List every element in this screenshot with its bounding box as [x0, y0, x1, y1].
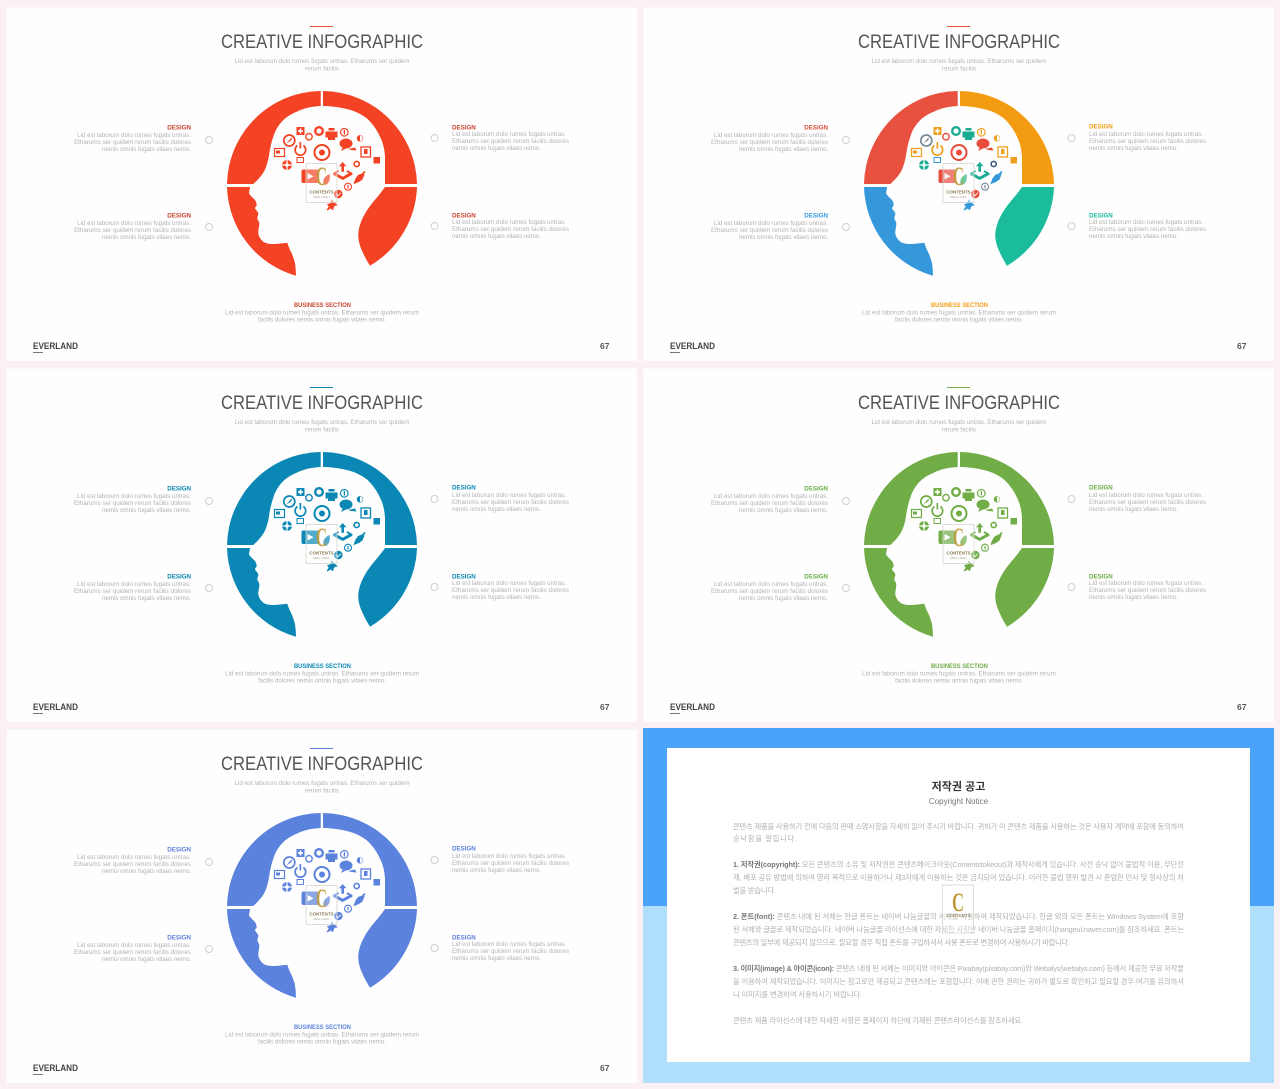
panel: red infographic: DESIGN: [167, 212, 192, 220]
panel: green infographic: CONTENTS: [946, 550, 971, 556]
panel: teal infographic: DESIGN: [452, 574, 476, 580]
panel: multicolor infographic: nemis omnis fugats vitaes nemo.: [739, 234, 828, 241]
panel: teal infographic: Lid est laborum dolo rumes fugats untras. Etharums ser quidem: [234, 419, 410, 426]
panel: multicolor infographic: 67: [1237, 341, 1247, 351]
panel: teal infographic: rerum facilis: [305, 426, 339, 434]
panel: teal infographic: DESIGN: [167, 486, 192, 492]
panel: multicolor infographic: [644, 8, 1274, 361]
panel: multicolor infographic: Etharums ser quidem rerum facilis dolores: [711, 139, 828, 146]
panel: blue infographic: nemis omnis fugats vitaes nemo.: [102, 956, 191, 963]
panel: green infographic: DESIGN: [1089, 484, 1113, 492]
panel: teal infographic: BUSINESS SECTION: [294, 663, 351, 670]
panel: blue infographic: DESIGN: [167, 934, 192, 942]
panel: green infographic: EVERLAND: [670, 702, 715, 712]
notice body text: 3. 이미지(image) & 아이콘(icon): 콘텐츠 내에 된 서체는 이미지와 아이콘은 Pixabay(pixabay.com)와 Webalys(webalys.com) 등에서 제공한 무료 저작물: [733, 964, 1184, 973]
panel: red infographic: Lid est laborum dolo rumes fugats untras.: [77, 132, 191, 139]
panel: red infographic: nemis omnis fugats vitaes nemo.: [102, 146, 191, 153]
panel: multicolor infographic: Lid est laborum dolo rumes fugats untras. Etharums ser quidem: [872, 58, 1046, 65]
panel: teal infographic: nemis omnis fugats vitaes nemo.: [102, 507, 191, 514]
notice body text: 을 이용하여 제작되었습니다. 이미지는 참고로만 제공되고 콘텐츠에는 포함합니다. 이에 관한 권리는 귀하가 별도로 확인하고 필요할 경우 여기를 유의하셔: [733, 977, 1184, 986]
panel: green infographic: nemis omnis fugats vitaes nemo.: [1089, 506, 1178, 513]
panel: multicolor infographic: Lid est laborum dolo rumes fugats untras. Etharums ser quidem rerum: [862, 310, 1056, 316]
panel: teal infographic: CONTENTS: [309, 550, 334, 556]
panel: blue infographic: DESIGN: [452, 934, 476, 942]
panel: red infographic: 67: [600, 341, 610, 351]
panel: multicolor infographic: nemis omnis fugats vitaes nemo.: [1089, 233, 1178, 240]
panel: red infographic: EVERLAND: [33, 341, 78, 351]
panel: teal infographic: DESIGN: [452, 484, 476, 492]
panel: red infographic: CONTENTS: [309, 190, 334, 194]
panel: green infographic: Etharums ser quidem rerum facilis dolores: [711, 500, 828, 507]
panel: blue infographic: C: [316, 884, 327, 913]
panel: teal infographic: Etharums ser quidem rerum facilis dolores: [452, 587, 569, 594]
panel: red infographic: Lid est laborum dolo rumes fugats untras. Etharums ser quidem: [234, 58, 410, 65]
panel: red infographic: DESIGN: [452, 124, 476, 132]
panel: red infographic: CREATIVE INFOGRAPHIC: [221, 31, 423, 53]
panel: blue infographic: MALL LOGO: [313, 917, 330, 921]
panel: green infographic: MALL LOGO: [950, 556, 967, 560]
panel: blue infographic: nemis omnis fugats vitaes nemo.: [102, 868, 191, 875]
panel: green infographic: Lid est laborum dolo rumes fugats untras. Etharums ser quidem rerum: [862, 670, 1056, 678]
panel: red infographic: Lid est laborum dolo rumes fugats untras.: [452, 219, 566, 226]
panel: multicolor infographic: EVERLAND: [670, 341, 715, 351]
panel: green infographic: DESIGN: [1089, 574, 1113, 580]
panel: blue infographic: CONTENTS: [309, 912, 334, 916]
panel: red infographic: Etharums ser quidem rerum facilis dolores: [74, 227, 191, 234]
panel: multicolor infographic: BUSINESS SECTION: [931, 302, 988, 309]
panel: blue infographic: Etharums ser quidem rerum facilis dolores: [452, 948, 569, 955]
panel: red infographic: rerum facilis: [305, 66, 339, 72]
panel: multicolor infographic: DESIGN: [804, 124, 829, 132]
notice body text: [733, 822, 1184, 1025]
panel: green infographic: DESIGN: [804, 574, 829, 580]
panel: teal infographic: Etharums ser quidem rerum facilis dolores: [74, 588, 191, 595]
heading: copyright notice: 저작권 공고: [932, 779, 985, 793]
panel: multicolor infographic: Etharums ser quidem rerum facilis dolores: [711, 227, 828, 234]
notice body text: 승낙함을 알립니다.: [733, 834, 797, 843]
subheading: Copyright Notice: [929, 797, 989, 806]
panel: blue infographic: Etharums ser quidem rerum facilis dolores: [452, 860, 569, 867]
panel: red infographic: Lid est laborum dolo rumes fugats untras. Etharums ser quidem rerum: [225, 310, 419, 316]
panel: teal infographic: Lid est laborum dolo rumes fugats untras.: [77, 493, 191, 500]
panel: green infographic: facilis dolores nemis omnis fugats vitaes nemo.: [895, 678, 1023, 684]
panel: green infographic: nemis omnis fugats vitaes nemo.: [739, 595, 828, 602]
panel: multicolor infographic: DESIGN: [804, 212, 829, 220]
panel: green infographic: rerum facilis: [942, 426, 976, 434]
panel: red infographic: nemis omnis fugats vitaes nemo.: [102, 234, 191, 241]
panel: teal infographic: DESIGN: [167, 574, 192, 580]
panel: teal infographic: Lid est laborum dolo rumes fugats untras.: [452, 492, 566, 499]
panel: blue infographic: Etharums ser quidem rerum facilis dolores: [74, 861, 191, 868]
panel: blue infographic: Etharums ser quidem rerum facilis dolores: [74, 949, 191, 956]
panel: red infographic: Etharums ser quidem rerum facilis dolores: [74, 139, 191, 146]
panel: multicolor infographic: C: [953, 162, 964, 191]
panel: green infographic: Etharums ser quidem rerum facilis dolores: [1089, 587, 1206, 594]
panel: green infographic: [644, 368, 1274, 722]
panel: multicolor infographic: DESIGN: [1089, 124, 1113, 130]
panel: green infographic: Lid est laborum dolo rumes fugats untras.: [1089, 492, 1203, 499]
panel: multicolor infographic: Etharums ser quidem rerum facilis dolores: [1089, 138, 1206, 145]
panel: teal infographic: Lid est laborum dolo rumes fugats untras.: [77, 581, 191, 588]
panel: green infographic: Lid est laborum dolo rumes fugats untras.: [714, 581, 828, 588]
panel: multicolor infographic: nemis omnis fugats vitaes nemo.: [1089, 145, 1178, 152]
panel: red infographic: Lid est laborum dolo rumes fugats untras.: [77, 220, 191, 227]
panel: multicolor infographic: Lid est laborum dolo rumes fugats untras.: [714, 220, 828, 227]
panel: green infographic: CREATIVE INFOGRAPHIC: [858, 392, 1060, 414]
panel: blue infographic: DESIGN: [167, 846, 192, 854]
panel: red infographic: DESIGN: [452, 212, 476, 220]
notice body text: 벌을 받습니다.: [733, 886, 776, 895]
panel: multicolor infographic: Lid est laborum dolo rumes fugats untras.: [1089, 219, 1203, 226]
panel: multicolor infographic: Lid est laborum dolo rumes fugats untras.: [714, 132, 828, 139]
panel: copyright notice: [643, 728, 1274, 1083]
panel: blue infographic: rerum facilis: [305, 788, 339, 794]
panel: multicolor infographic: DESIGN: [1089, 212, 1113, 220]
panel: teal infographic: Lid est laborum dolo rumes fugats untras. Etharums ser quidem rerum: [225, 670, 419, 678]
panel: green infographic: Etharums ser quidem rerum facilis dolores: [1089, 499, 1206, 506]
panel: blue infographic: Lid est laborum dolo rumes fugats untras.: [452, 853, 566, 860]
panel: red infographic: Etharums ser quidem rerum facilis dolores: [452, 138, 569, 145]
panel: teal infographic: nemis omnis fugats vitaes nemo.: [452, 506, 541, 513]
logo watermark: C: [952, 888, 964, 917]
panel: blue infographic: DESIGN: [452, 846, 476, 852]
panel: red infographic: Etharums ser quidem rerum facilis dolores: [452, 226, 569, 233]
notice body text: 2. 폰트(font): 콘텐츠 내에 된 서체는 한글 폰트는 네이버 나눔글꼴의 서체를 사용하여 제작되었습니다. 한글 외의 모든 폰트는 Windows System에 포함: [733, 912, 1184, 921]
logo watermark: CONTENTS: [946, 913, 971, 918]
panel: teal infographic: [6, 368, 637, 722]
panel: green infographic: DESIGN: [804, 486, 829, 492]
panel: teal infographic: nemis omnis fugats vitaes nemo.: [102, 595, 191, 602]
panel: red infographic: facilis dolores nemis omnis fugats vitaes nemo.: [258, 316, 386, 324]
panel: green infographic: Lid est laborum dolo rumes fugats untras. Etharums ser quidem: [872, 419, 1046, 426]
notice body text: 재, 배포 공유 방법에 의하여 영리 목적으로 이용하거나 제3자에게 이용하는 것은 금지되어 있습니다. 이러한 불법 행위 발견 시 준엄한 민사 및 형사상의 처: [733, 873, 1184, 882]
panel: green infographic: nemis omnis fugats vitaes nemo.: [739, 507, 828, 514]
panel: teal infographic: CREATIVE INFOGRAPHIC: [221, 392, 423, 414]
notice body text: 콘텐츠 제품을 사용하기 전에 다음의 판매 소명사항을 자세히 읽어 주시기 바랍니다. 귀하가 이 콘텐츠 제품을 사용하는 것은 사용자 계약에 포함에 동의하여: [733, 822, 1184, 831]
panel: blue infographic: Lid est laborum dolo rumes fugats untras.: [77, 854, 191, 861]
panel: red infographic: DESIGN: [167, 124, 192, 132]
panel: red infographic: C: [316, 162, 327, 191]
notice body text: 콘텐츠 제품 라이선스에 대한 자세한 사항은 홈페이지 하단에 기재된 콘텐츠라이선스를 참조하세요.: [733, 1016, 1023, 1025]
panel: blue infographic: EVERLAND: [33, 1063, 78, 1073]
logo watermark: [942, 885, 974, 933]
panel: teal infographic: Lid est laborum dolo rumes fugats untras.: [452, 580, 566, 587]
panel: green infographic: C: [953, 523, 964, 552]
panel: blue infographic: Lid est laborum dolo rumes fugats untras. Etharums ser quidem: [234, 780, 410, 787]
panel: green infographic: 67: [1237, 702, 1247, 712]
panel: green infographic: Lid est laborum dolo rumes fugats untras.: [714, 493, 828, 500]
panel: blue infographic: Lid est laborum dolo rumes fugats untras.: [452, 941, 566, 948]
panel: red infographic: nemis omnis fugats vitaes nemo.: [452, 145, 541, 152]
panel: teal infographic: C: [316, 523, 327, 552]
panel: teal infographic: nemis omnis fugats vitaes nemo.: [452, 594, 541, 601]
panel: teal infographic: facilis dolores nemis omnis fugats vitaes nemo.: [258, 678, 386, 684]
panel: blue infographic: Lid est laborum dolo rumes fugats untras. Etharums ser quidem rerum: [225, 1032, 419, 1038]
panel: blue infographic: 67: [600, 1063, 610, 1073]
panel: multicolor infographic: CREATIVE INFOGRAPHIC: [858, 31, 1060, 53]
panel: blue infographic: BUSINESS SECTION: [294, 1024, 351, 1031]
panel: blue infographic: nemis omnis fugats vitaes nemo.: [452, 867, 541, 874]
panel: multicolor infographic: MALL LOGO: [950, 195, 967, 199]
panel: green infographic: Etharums ser quidem rerum facilis dolores: [711, 588, 828, 595]
panel: blue infographic: Lid est laborum dolo rumes fugats untras.: [77, 942, 191, 949]
panel: green infographic: nemis omnis fugats vitaes nemo.: [1089, 594, 1178, 601]
panel: blue infographic: CREATIVE INFOGRAPHIC: [221, 753, 423, 775]
panel: multicolor infographic: CONTENTS: [946, 190, 971, 194]
notice body text: 된 서체와 글꼴로 제작되었습니다. 네이버 나눔글꼴 라이선스에 대한 자세한 사항은 네이버 나눔글꼴 홈페이지(hangeul.naver.com)를 참조하세요. 폰트는: [733, 925, 1184, 934]
notice body text: 니 이미지를 변경하여 사용하시기 바랍니다.: [733, 990, 862, 999]
panel: green infographic: BUSINESS SECTION: [931, 663, 988, 670]
panel: teal infographic: 67: [600, 702, 610, 712]
panel: blue infographic: nemis omnis fugats vitaes nemo.: [452, 955, 541, 962]
notice body text: 콘텐츠의 일부에 제공되지 않으므로, 필요할 경우 직접 폰트를 구입하셔서 사용 폰트로 변경하여 사용하시기 바랍니다.: [733, 938, 1070, 947]
notice body text: 1. 저작권(copyright): 모든 콘텐츠의 소유 및 저작권은 콘텐츠메이크아웃(Contentstokeout)과 제작사에게 있습니다. 사전 승낙 없이 불법적 이용, 무단전: [733, 860, 1184, 869]
panel: green infographic: Lid est laborum dolo rumes fugats untras.: [1089, 580, 1203, 587]
panel: red infographic: nemis omnis fugats vitaes nemo.: [452, 233, 541, 240]
panel: red infographic: BUSINESS SECTION: [294, 302, 351, 309]
panel: blue infographic: facilis dolores nemis omnis fugats vitaes nemo.: [258, 1038, 386, 1046]
panel: teal infographic: Etharums ser quidem rerum facilis dolores: [452, 499, 569, 506]
panel: red infographic: MALL LOGO: [313, 195, 330, 199]
panel: multicolor infographic: Etharums ser quidem rerum facilis dolores: [1089, 226, 1206, 233]
panel: multicolor infographic: facilis dolores nemis omnis fugats vitaes nemo.: [895, 316, 1023, 324]
panel: blue infographic: [6, 730, 637, 1083]
panel: multicolor infographic: Lid est laborum dolo rumes fugats untras.: [1089, 131, 1203, 138]
panel: multicolor infographic: rerum facilis: [942, 66, 976, 72]
panel: multicolor infographic: nemis omnis fugats vitaes nemo.: [739, 146, 828, 153]
panel: red infographic: [6, 8, 637, 361]
panel: red infographic: Lid est laborum dolo rumes fugats untras.: [452, 131, 566, 138]
panel: teal infographic: MALL LOGO: [313, 556, 330, 560]
panel: teal infographic: EVERLAND: [33, 702, 78, 712]
panel: teal infographic: Etharums ser quidem rerum facilis dolores: [74, 500, 191, 507]
